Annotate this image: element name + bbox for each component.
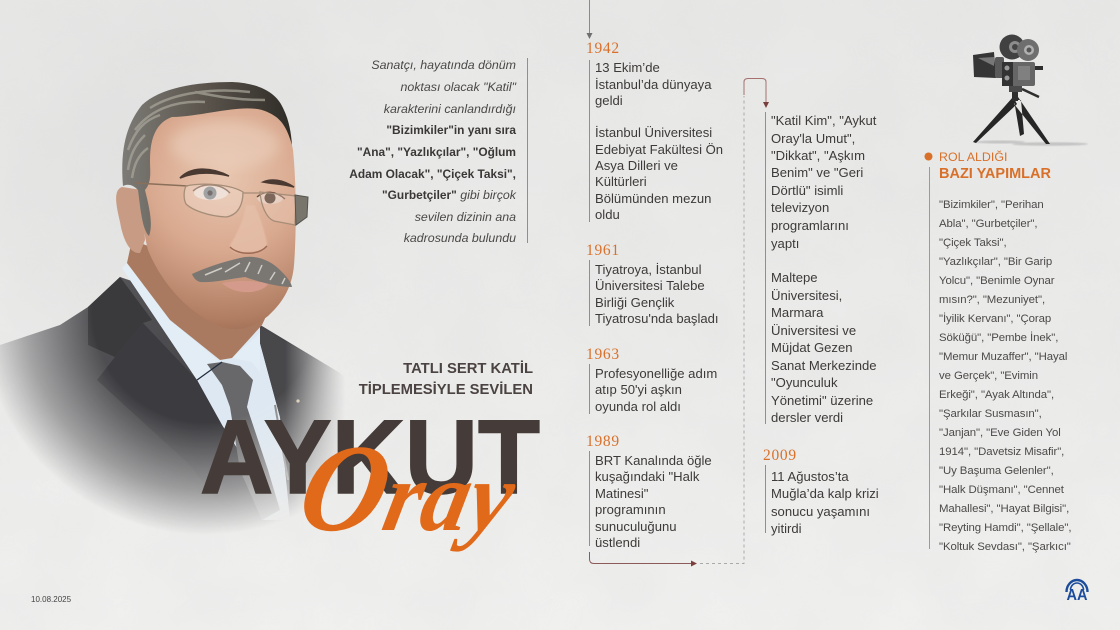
1961: 1961 bbox=[586, 242, 620, 259]
1963: Profesyonelliğe adım bbox=[595, 366, 717, 381]
list of productions: Söküğü", "Pembe İnek", bbox=[939, 331, 1058, 344]
timeline start arrow bbox=[586, 0, 592, 39]
1942: Bölümünden mezun bbox=[595, 191, 711, 206]
television and teaching text bbox=[766, 112, 877, 425]
list of productions: Erkeği", "Ayak Altında", bbox=[939, 389, 1054, 401]
list of productions: Yolcu", "Benimle Oynar bbox=[939, 275, 1055, 287]
1963 bbox=[586, 346, 717, 414]
television and teaching text: "Oyunculuk bbox=[771, 375, 838, 390]
connector arrow between columns bbox=[590, 78, 769, 566]
nose bbox=[230, 205, 267, 253]
icon: film camera on tripod bbox=[973, 34, 1088, 146]
list of productions: Abla", "Gurbetçiler", bbox=[939, 218, 1037, 230]
1942: 13 Ekim’de bbox=[595, 60, 660, 75]
television and teaching text: "Katil Kim", "Aykut bbox=[771, 113, 877, 128]
1963: atıp 50'yi aşkın bbox=[595, 382, 682, 397]
hair strands bbox=[128, 91, 265, 178]
glasses bbox=[135, 183, 308, 225]
1942: oldu bbox=[595, 207, 620, 222]
1942: Edebiyat Fakültesi Ön bbox=[595, 142, 723, 157]
television and teaching text: Dörtlü" isimli bbox=[771, 183, 843, 198]
1961: Tiyatrosu'nda başladı bbox=[595, 311, 719, 326]
1989: kuşağındaki "Halk bbox=[595, 469, 700, 484]
2009 bbox=[763, 447, 879, 536]
subtitle bbox=[359, 360, 533, 398]
television and teaching text: Yönetimi" üzerine bbox=[771, 393, 873, 408]
intro paragraph bbox=[349, 58, 528, 245]
2009: sonucu yaşamını bbox=[771, 504, 870, 519]
1989: üstlendi bbox=[595, 535, 640, 550]
television and teaching text: Marmara bbox=[771, 305, 824, 320]
television and teaching text: yaptı bbox=[771, 236, 799, 251]
heading: selected productions: BAZI YAPIMLAR bbox=[939, 166, 1052, 182]
subtitle: TİPLEMESİYLE SEVİLEN bbox=[359, 381, 533, 398]
intro paragraph: Sanatçı, hayatında dönüm bbox=[371, 58, 516, 72]
list of productions: Mahallesi", "Hayat Bilgisi", bbox=[939, 503, 1069, 515]
list of productions: "İyilik Kervanı", "Çorap bbox=[939, 312, 1051, 325]
list of productions bbox=[930, 167, 1071, 553]
list of productions: mısın?", "Mezuniyet", bbox=[939, 294, 1045, 306]
1942: İstanbul’da dünyaya bbox=[595, 77, 712, 92]
1989 bbox=[586, 433, 712, 550]
ear bbox=[116, 187, 145, 253]
list of productions: "Memur Muzaffer", "Hayal bbox=[939, 351, 1067, 363]
list of productions: "Koltuk Sevdası", "Şarkıcı" bbox=[939, 541, 1071, 553]
1942: Kültürleri bbox=[595, 174, 647, 189]
list of productions: "Uy Başuma Gelenler", bbox=[939, 465, 1054, 477]
list of productions: "Şarkılar Susmasın", bbox=[939, 408, 1042, 420]
1963: oyunda rol aldı bbox=[595, 399, 681, 414]
2009: 2009 bbox=[763, 447, 797, 464]
television and teaching text: Üniversitesi, bbox=[771, 288, 842, 303]
1961 bbox=[586, 242, 719, 326]
list of productions: 1914", "Davetsiz Misafir", bbox=[939, 446, 1064, 458]
television and teaching text: "Dikkat", "Aşkım bbox=[771, 148, 865, 163]
forehead highlight bbox=[170, 121, 280, 169]
intro paragraph: noktası olacak "Katil" bbox=[400, 80, 517, 94]
timeline column 2 bbox=[763, 112, 879, 536]
heading: selected productions: ROL ALDIĞI bbox=[939, 149, 1007, 164]
eyes bbox=[193, 185, 285, 204]
heading: selected productions bbox=[924, 149, 1052, 182]
list of productions: "Çiçek Taksi", bbox=[939, 237, 1007, 249]
list of productions: "Bizimkiler", "Perihan bbox=[939, 199, 1044, 211]
intro paragraph: kadrosunda bulundu bbox=[404, 231, 516, 245]
2009: yitirdi bbox=[771, 521, 802, 536]
television and teaching text: Müjdat Gezen bbox=[771, 340, 853, 355]
television and teaching text: Sanat Merkezinde bbox=[771, 358, 877, 373]
1963: 1963 bbox=[586, 346, 620, 363]
list of productions: "Halk Düşmanı", "Cennet bbox=[939, 484, 1065, 496]
1989: 1989 bbox=[586, 433, 620, 450]
1989: sunuculuğunu bbox=[595, 519, 677, 534]
intro paragraph: sevilen dizinin ana bbox=[415, 210, 516, 224]
1942: geldi bbox=[595, 93, 623, 108]
name: Aykut: AYKUT bbox=[200, 399, 540, 516]
icon: Anadolu Agency logo bbox=[1066, 580, 1088, 604]
1942 bbox=[586, 40, 723, 222]
1961: Üniversitesi Talebe bbox=[595, 278, 705, 293]
1942: 1942 bbox=[586, 40, 620, 57]
timeline column 1 bbox=[586, 0, 723, 550]
intro paragraph: Adam Olacak", "Çiçek Taksi", bbox=[349, 167, 516, 181]
1961: Birliği Gençlik bbox=[595, 295, 675, 310]
1961: Tiyatroya, İstanbul bbox=[595, 262, 702, 277]
television and teaching text: Maltepe bbox=[771, 270, 818, 285]
1989: Matinesi" bbox=[595, 486, 649, 501]
hair bbox=[122, 82, 292, 236]
list of productions: ve Gerçek", "Evimin bbox=[939, 370, 1038, 382]
1989: BRT Kanalında öğle bbox=[595, 453, 712, 468]
intro paragraph: "Ana", "Yazlıkçılar", "Oğlum bbox=[357, 145, 516, 159]
television and teaching text: Benim" ve "Geri bbox=[771, 165, 863, 180]
eyebrows bbox=[180, 169, 294, 187]
television and teaching text: Üniversitesi ve bbox=[771, 323, 856, 338]
list of productions: "Yazlıkçılar", "Bir Garip bbox=[939, 256, 1052, 268]
television and teaching text: programlarını bbox=[771, 218, 849, 233]
1942: Asya Dilleri ve bbox=[595, 158, 678, 173]
intro paragraph: karakterini canlandırdığı bbox=[384, 102, 516, 116]
name: Oray: Oray bbox=[288, 419, 531, 558]
mouth bbox=[222, 281, 268, 292]
2009: 11 Ağustos’ta bbox=[771, 469, 849, 484]
television and teaching text: Oray'la Umut", bbox=[771, 131, 855, 146]
television and teaching text: televizyon bbox=[771, 200, 829, 215]
date: 10.08.2025 bbox=[31, 595, 72, 604]
2009: Muğla’da kalp krizi bbox=[771, 486, 879, 501]
suit and shirt bbox=[0, 263, 341, 530]
television and teaching text: dersler verdi bbox=[771, 410, 843, 425]
1942: İstanbul Üniversitesi bbox=[595, 125, 712, 140]
intro paragraph: "Bizimkiler"in yanı sıra bbox=[386, 123, 516, 137]
face bbox=[139, 104, 296, 329]
moustache bbox=[192, 257, 292, 287]
intro paragraph: "Gurbetçiler" gibi birçok bbox=[382, 188, 517, 202]
1989: programının bbox=[595, 502, 666, 517]
subtitle: TATLI SERT KATİL bbox=[403, 360, 533, 377]
icon: Anadolu Agency logo: AA bbox=[1066, 587, 1088, 604]
list of productions: "Janjan", "Eve Giden Yol bbox=[939, 427, 1061, 439]
portrait of Aykut Oray bbox=[0, 82, 341, 530]
list of productions: "Reyting Hamdi", "Şellale", bbox=[939, 522, 1071, 534]
neck bbox=[127, 240, 268, 360]
